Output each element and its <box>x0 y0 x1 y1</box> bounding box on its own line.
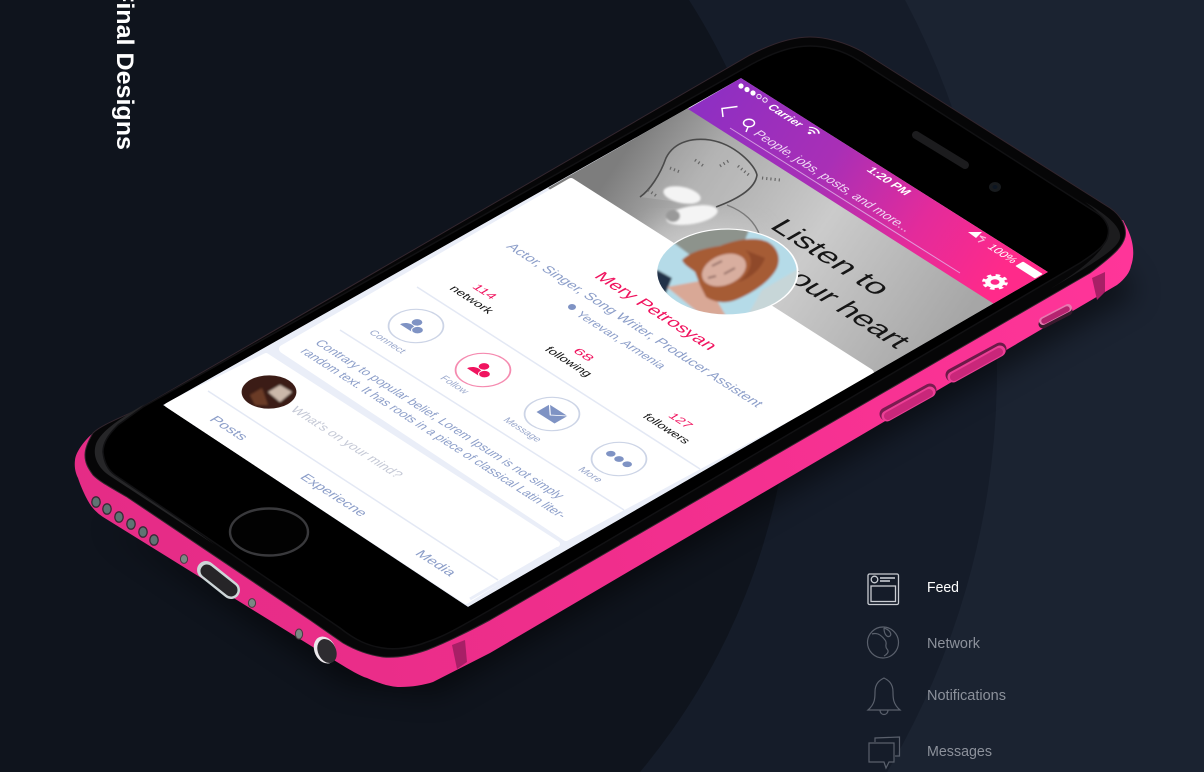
carrier label: Carrier <box>764 103 806 129</box>
battery <box>1015 261 1043 279</box>
cover handwriting: Listen to your heart: your heart <box>768 258 918 352</box>
bio text: Contrary to popular belief, Lorem Ipsum is not simply <box>312 337 569 501</box>
phone front: inner glass <box>103 46 1109 649</box>
menu: feed <box>868 574 959 604</box>
menu: messages <box>869 737 992 768</box>
front camera <box>989 182 1001 192</box>
earpiece speaker <box>916 135 965 165</box>
stat: network: network <box>446 284 496 316</box>
action: follow <box>440 352 512 394</box>
compose card <box>168 356 558 601</box>
lower left rim highlight <box>95 404 215 545</box>
tab: experience: Experiecne <box>297 472 371 518</box>
menu: notifications: Notifications <box>927 688 1006 704</box>
role: Actor, Singer, Song Writer, Producer Assistent <box>503 241 767 409</box>
braille dots <box>648 160 780 197</box>
battery percent: 100% <box>984 243 1020 265</box>
tab: media: Media <box>412 548 461 578</box>
phone side antenna bands <box>452 272 1105 669</box>
search icon <box>744 119 754 132</box>
stat: followers: 127 <box>665 412 695 430</box>
action: connect: Connect <box>366 329 408 355</box>
action: message: Message <box>500 416 544 444</box>
home button <box>230 508 308 556</box>
screws <box>180 555 303 639</box>
small avatar <box>242 375 296 409</box>
menu: notifications <box>868 678 1006 714</box>
menu: network: Network <box>927 636 981 652</box>
action: connect <box>370 308 444 354</box>
earbuds <box>662 185 718 226</box>
action: follow: Follow <box>437 374 472 396</box>
compose placeholder: What's on your mind? <box>287 404 407 480</box>
search placeholder: People, jobs, posts, and more... <box>750 128 916 234</box>
headphone jack <box>310 633 340 667</box>
wifi icon <box>808 126 820 134</box>
cover photo <box>548 108 994 400</box>
charging port <box>206 570 231 590</box>
back chevron <box>722 106 738 117</box>
location: Yerevan, Armenia <box>572 309 670 371</box>
action: more: More <box>575 466 606 485</box>
menu: network <box>868 627 981 658</box>
cover handwriting: Listen to your heart <box>771 219 909 349</box>
volume buttons <box>886 349 1000 416</box>
search underline <box>730 128 960 273</box>
phone <box>75 37 1136 694</box>
phone front: black glass <box>85 37 1125 657</box>
profile card <box>283 182 870 537</box>
menu: messages: Messages <box>927 744 992 760</box>
screen <box>163 78 1048 607</box>
settings gear <box>982 274 1008 290</box>
header bar <box>688 78 1048 304</box>
stat: following: following <box>541 345 595 379</box>
action: message <box>504 396 580 442</box>
location and bluetooth glyphs <box>968 232 986 242</box>
side menu <box>868 574 1006 768</box>
cover handwriting: Listen to your heart: Listen to <box>763 214 899 300</box>
bio text: random text. It has roots in a piece of classical Latin liter- <box>297 346 571 520</box>
status dots <box>738 83 767 102</box>
stat: following: 68 <box>570 347 596 363</box>
action: more <box>578 442 648 482</box>
profile avatar <box>657 228 798 314</box>
tab: posts: Posts <box>206 414 252 443</box>
speaker holes <box>92 497 158 545</box>
name: Mery Petrosyan <box>590 269 722 353</box>
side switch <box>1043 308 1068 324</box>
stat: network: 114 <box>469 283 499 301</box>
clock: 1:20 PM <box>863 165 915 197</box>
right corner rim highlight <box>1050 202 1120 289</box>
stat: followers: followers <box>639 412 693 446</box>
menu: feed: Feed <box>927 580 959 596</box>
phone body: pink side <box>75 220 1133 687</box>
